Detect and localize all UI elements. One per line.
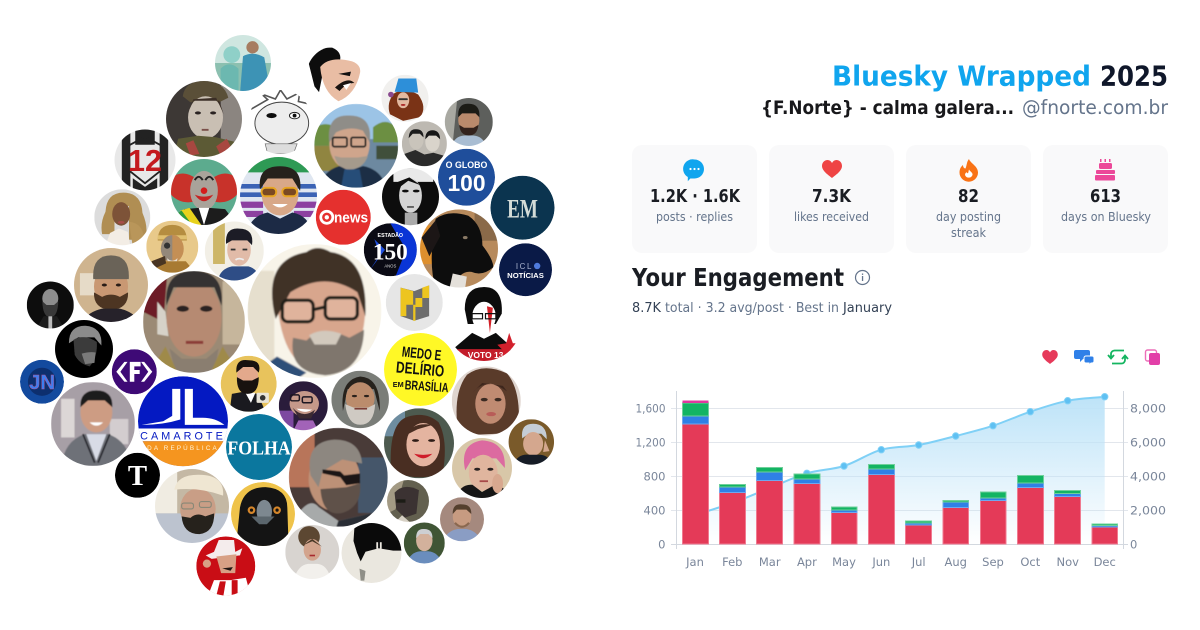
avatar: woman with yellow glasses and stripes [240, 157, 317, 234]
avatar: man in front of lake [314, 104, 398, 188]
avatar: voto 13 woman illustration: VOTO 13 [468, 350, 504, 360]
avatar: older man with white beard [331, 371, 389, 428]
avatar: cartoon child drawing [248, 90, 312, 154]
right axis labels: 8,000 [1130, 402, 1166, 416]
title: 2025 [1100, 60, 1168, 92]
month labels: Nov [1056, 555, 1079, 569]
avatar: cartoon portrait black hair [308, 48, 360, 102]
avatar: red-haired woman with blue cap [382, 75, 428, 122]
panel: posts and replies [632, 145, 757, 253]
panel: day posting streak [906, 145, 1031, 253]
avatar: Folha logo: FOLHA [227, 437, 291, 459]
right axis labels: 2,000 [1130, 504, 1166, 518]
avatar: grey haired man black and white [55, 320, 113, 378]
panel: posts and replies: 1.2K · 1.6K [650, 186, 741, 207]
account name and handle: @fnorte.com.br [1022, 96, 1169, 119]
avatar: older woman with short grey hair [509, 419, 554, 465]
chart legend icons [1042, 350, 1160, 365]
month labels: Sep [982, 555, 1004, 569]
icon: quotes [1146, 350, 1160, 365]
panel: posts and replies: posts · replies [656, 210, 733, 224]
avatar: CNN news logo [316, 190, 371, 245]
avatar: two men black and white [402, 121, 447, 166]
avatar: man in sunglasses side profile [289, 428, 388, 527]
avatar: EM logo: EM [507, 193, 538, 223]
avatar: emu illustration [231, 482, 295, 546]
avatar: New York Times logo [115, 453, 160, 498]
icon: speech bubble [683, 159, 704, 181]
stacked monthly bars [682, 400, 1118, 544]
left axis labels: 800 [644, 470, 666, 484]
avatar: woman in soviet uniform [166, 81, 242, 157]
avatar: blonde woman [94, 189, 150, 245]
avatar: O Globo 100 logo [438, 149, 495, 206]
heading: your engagement: Your Engagement [631, 263, 844, 292]
panel: days on Bluesky: days on Bluesky [1061, 210, 1151, 224]
panel: day posting streak: day posting [936, 210, 1001, 224]
avatar: clown with presidential sash [171, 159, 237, 225]
avatar: Estadao 150 anos logo: ESTADÃO [378, 232, 403, 239]
avatar: Medo e Delirio em Brasilia logo: BRASÍLIA [404, 377, 449, 395]
avatar: man with knit beanie [74, 248, 148, 322]
right axis labels [1130, 402, 1166, 552]
account name and handle [761, 96, 1169, 119]
left axis labels: 1,600 [636, 402, 666, 416]
avatar: Estadao 150 anos logo: 150 [373, 239, 408, 265]
avatar: ICL Noticias logo: ICL [516, 262, 533, 271]
avatar: Camarote da Republica logo [138, 376, 228, 466]
avatar: Estadao 150 anos logo [364, 223, 417, 276]
month labels: Dec [1094, 555, 1116, 569]
avatar: Estadao 150 anos logo: ANOS [384, 263, 396, 268]
month labels: Jan [685, 555, 704, 569]
month labels: Feb [722, 555, 742, 569]
right axis labels: 6,000 [1130, 436, 1166, 450]
engagement summary: total · 3.2 avg/post · Best in [665, 300, 839, 316]
icon: info [856, 270, 870, 284]
month labels: Jun [871, 555, 890, 569]
panel: likes received [769, 145, 894, 253]
avatar: Medo e Delirio em Brasilia logo [384, 333, 457, 406]
month labels: Mar [759, 555, 781, 569]
avatar: black ink shape on cream [342, 523, 402, 583]
icon: heart [822, 160, 842, 178]
title: Bluesky Wrapped [832, 60, 1091, 92]
icon: likes [1042, 350, 1058, 364]
avatar: smiling older man [404, 522, 445, 564]
engagement summary: 8.7K [632, 300, 662, 316]
avatar: JN logo: JN [29, 372, 55, 394]
avatar: man in grey cardigan [51, 382, 135, 466]
left axis labels [636, 402, 666, 552]
avatar: woman with red lipstick [384, 408, 454, 478]
avatar: man with brick wall [440, 497, 484, 541]
avatar: black dog [420, 210, 498, 288]
icon: replies [1074, 350, 1094, 365]
avatar: main profile, man with glasses and grey beard [248, 244, 382, 378]
avatar: corinthians 12 flag: 12 [128, 144, 162, 178]
right axis labels: 0 [1130, 538, 1137, 552]
month labels: Oct [1020, 555, 1041, 569]
avatar: New York Times logo: T [128, 460, 147, 492]
avatar: Folha logo [226, 414, 292, 480]
month labels: May [832, 555, 856, 569]
account name and handle: {F.Norte} - calma galera... [761, 97, 1014, 119]
avatar: shaded figure [387, 480, 429, 522]
icon: birthday cake [1095, 159, 1115, 180]
avatar: woman with curly updo [285, 525, 339, 579]
panel: day posting streak: 82 [958, 186, 979, 207]
panel: days on Bluesky [1043, 145, 1168, 253]
avatar: yellow and grey book logo [386, 274, 443, 331]
engagement summary: January [842, 300, 892, 316]
avatar: Camarote da Republica logo: CAMAROTE [140, 430, 226, 442]
avatar: bearded cartoon man with camera [221, 356, 277, 412]
avatar: CNN news logo: news [334, 210, 368, 226]
avatar: woman with long brown hair [452, 366, 521, 436]
avatar: man with red and gold collar [143, 271, 245, 373]
panel: day posting streak: streak [951, 226, 986, 240]
avatar: woman with pink hair [452, 438, 512, 498]
avatar: voto 13 woman illustration [455, 287, 516, 361]
month labels: Aug [944, 555, 967, 569]
panel: likes received: 7.3K [812, 186, 852, 207]
left axis labels: 400 [644, 504, 666, 518]
cumulative area [695, 397, 1105, 544]
avatar: cartoon man in white hat [196, 536, 255, 596]
cumulative line [695, 394, 1108, 515]
avatar cluster [20, 35, 554, 596]
avatar: ICL Noticias logo: NOTÍCIAS [507, 271, 544, 280]
month labels [685, 555, 1116, 569]
avatar: family in teal [215, 35, 271, 91]
avatar: young man with dark fringe [205, 222, 264, 280]
month labels: Apr [797, 555, 817, 569]
engagement chart [636, 391, 1166, 569]
avatar: woman black and white [382, 168, 439, 225]
avatar: Camarote da Republica logo: DA REPÚBLICA [147, 443, 219, 452]
avatar: corinthians 12 flag [114, 130, 176, 190]
avatar: O Globo 100 logo: O GLOBO [446, 160, 487, 170]
avatar: laughing man with glasses in purple [279, 381, 328, 430]
avatar: Medo e Delirio em Brasilia logo: EM [393, 380, 404, 389]
icon: flame [960, 159, 978, 182]
avatar: selfie man in car [445, 98, 493, 146]
month labels: Jul [911, 555, 926, 569]
avatar: ICL Noticias logo [499, 243, 552, 296]
avatar: Medo e Delirio em Brasilia logo: DELÍRIO [395, 357, 445, 381]
panel: days on Bluesky: 613 [1090, 186, 1121, 207]
right axis labels: 4,000 [1130, 470, 1166, 484]
avatar: Medo e Delirio em Brasilia logo: MEDO E [401, 344, 442, 364]
avatar: O Globo 100 logo: 100 [447, 170, 486, 196]
left axis labels: 0 [658, 538, 666, 552]
panel: likes received: likes received [794, 210, 869, 224]
avatar: EM logo [490, 176, 554, 240]
avatar: purple F logo [112, 349, 157, 394]
avatar: JN logo [20, 360, 64, 404]
avatar: man in white cap [155, 469, 229, 543]
left axis labels: 1,200 [636, 436, 666, 450]
icon: reposts [1108, 350, 1128, 364]
avatar: cyborg samurai painting [146, 221, 198, 273]
avatar: bearded man black and white [27, 282, 74, 328]
